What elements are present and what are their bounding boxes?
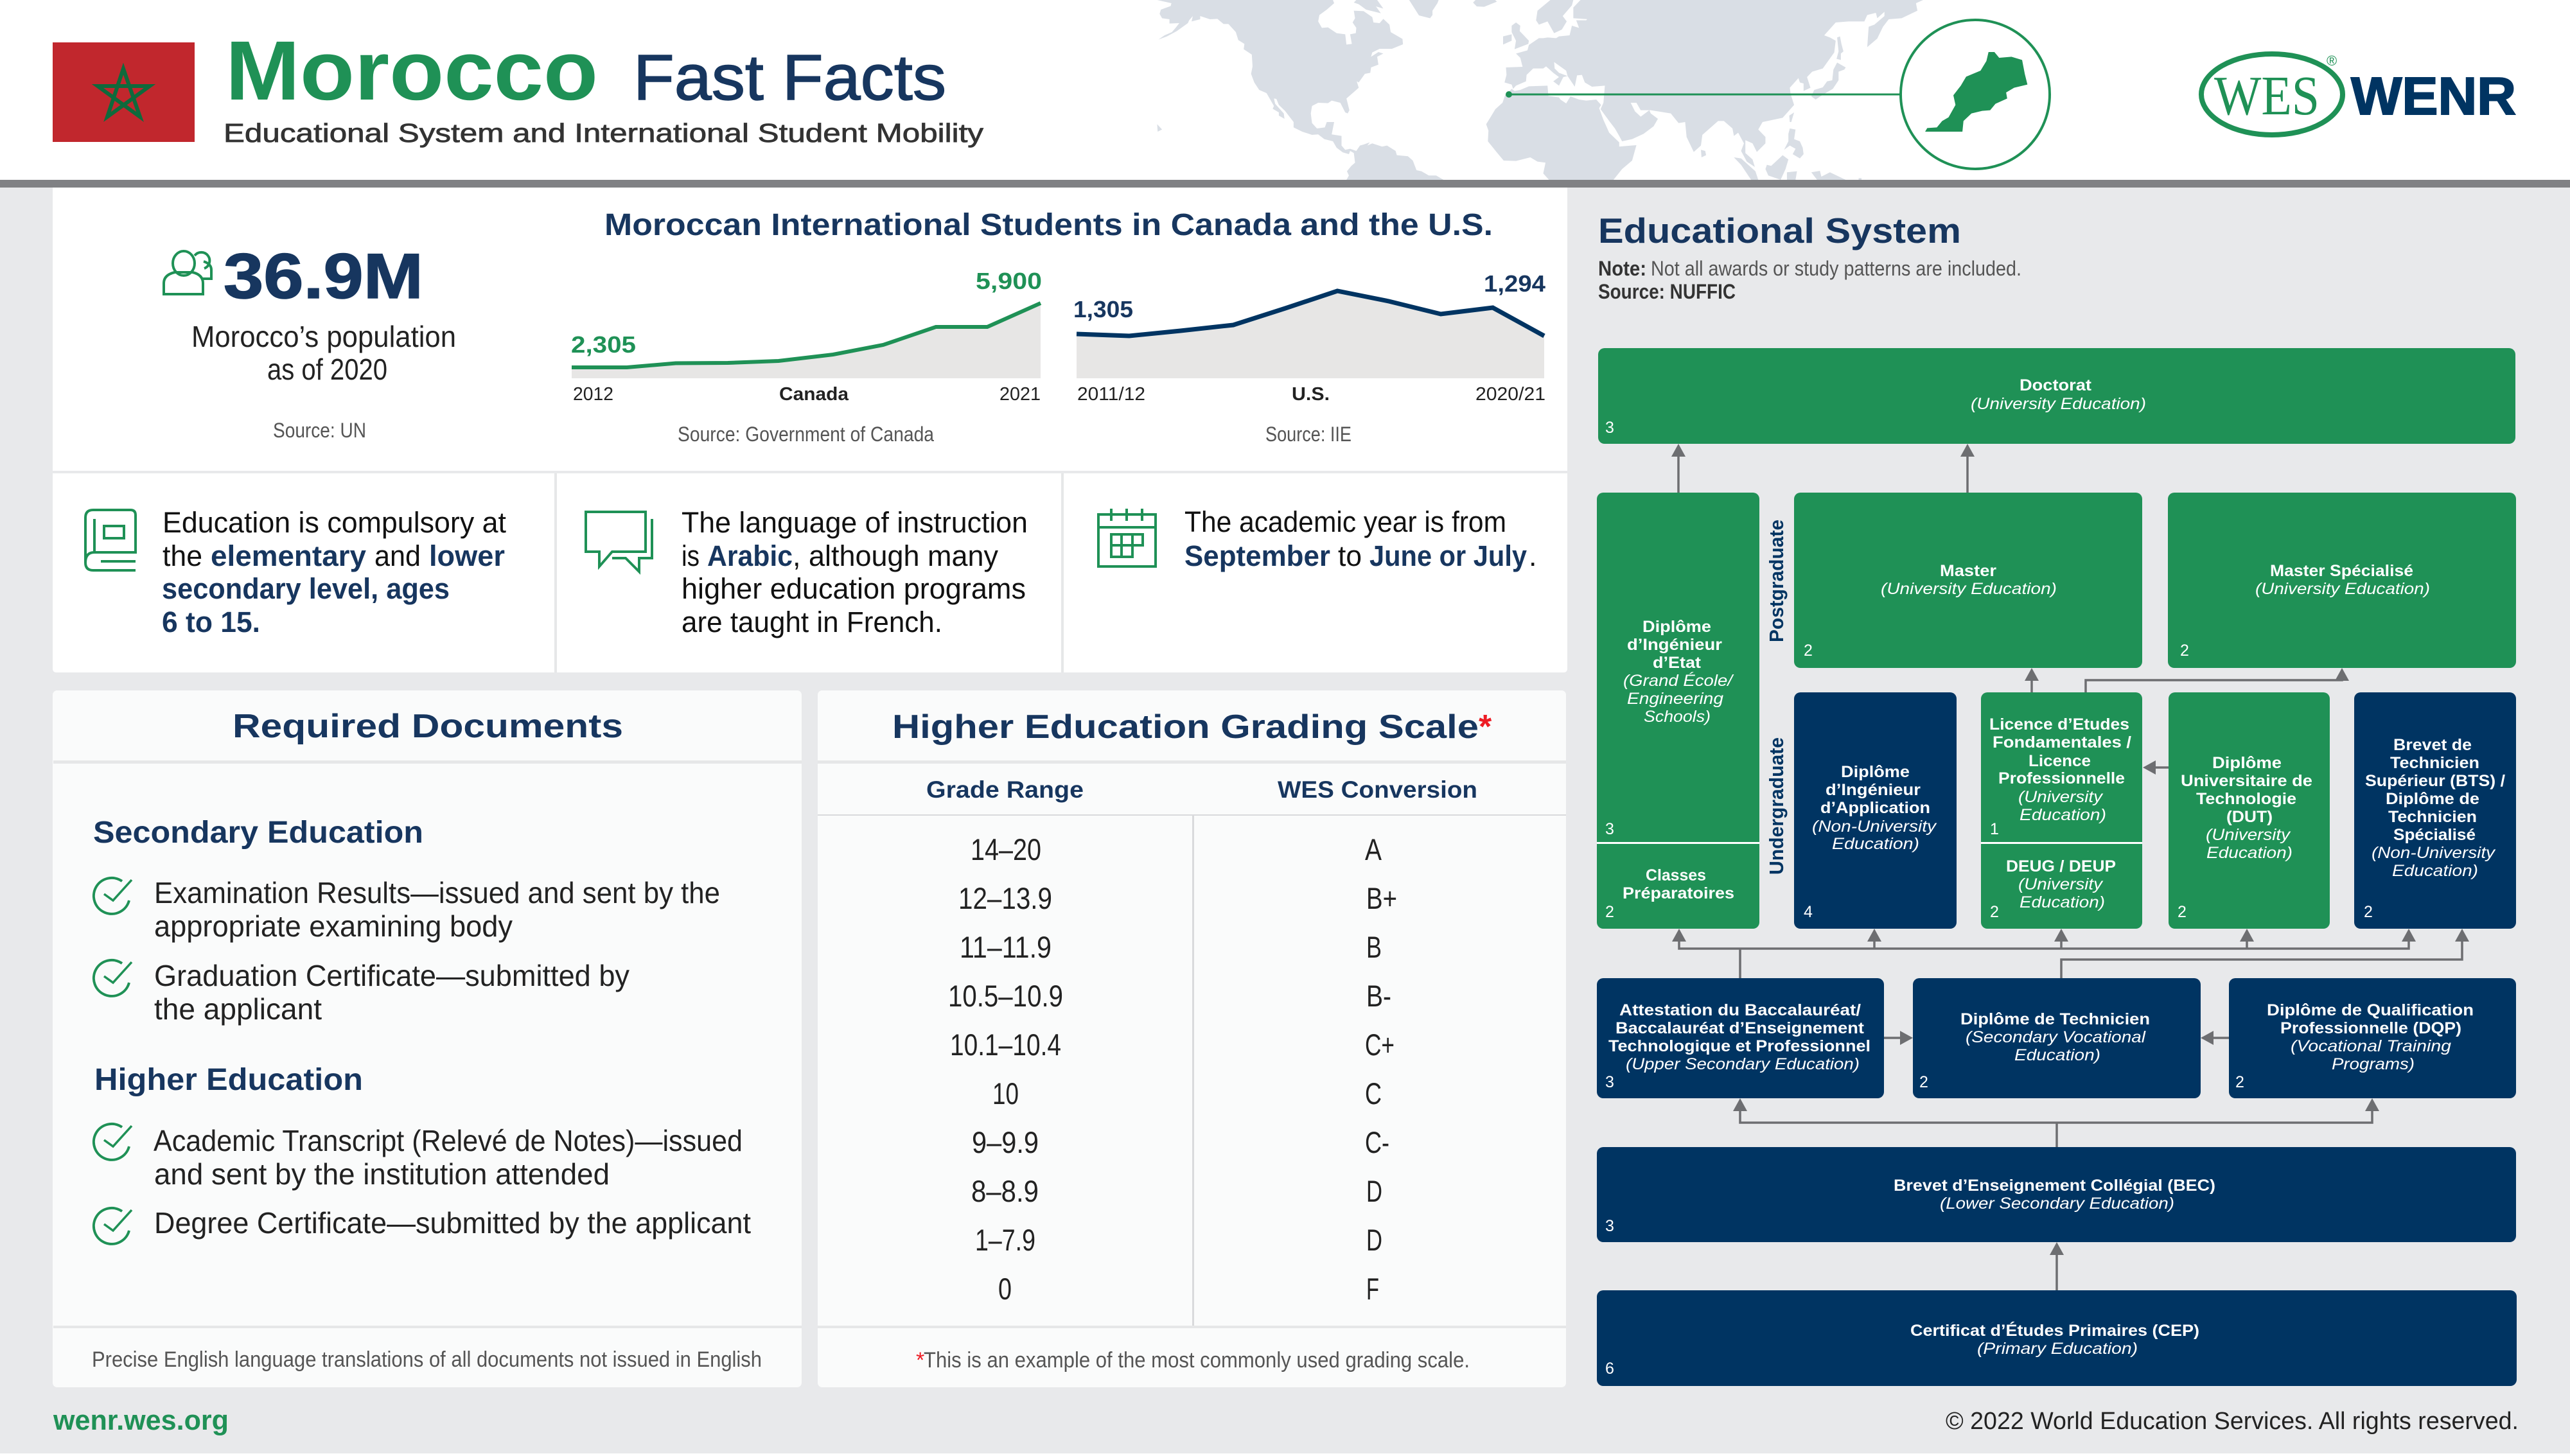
subheading: secondary education: Secondary Education: [93, 816, 423, 850]
table header: Grade Range: [926, 776, 1084, 803]
box: Master: [1794, 493, 2142, 668]
line chart: U.S.: 2011/12: [1077, 384, 1145, 405]
note and source: Not all awards or study patterns are included.: [1651, 257, 2021, 280]
box: Diplôme de Qualification Professionnelle: Programs): [2332, 1055, 2415, 1073]
icon: check: [94, 878, 132, 914]
box: Diplôme de Technicien: Diplôme de Technicien: [1960, 1010, 2150, 1028]
fact: academic year: to: [1338, 539, 1362, 572]
footnote: translations: Precise English language translations of all documents not issued in English: [92, 1347, 762, 1372]
box: Licence and DEUG / DEUP: DEUG / DEUP: [2006, 857, 2116, 875]
item: academic transcript: [154, 1124, 743, 1191]
panel: required documents: [53, 690, 802, 1387]
icon: speech bubbles: [586, 512, 652, 572]
box: BTS: Technicien: [2390, 754, 2479, 772]
heading: grading scale: Higher Education Grading Scale: [892, 708, 1479, 746]
box: BTS: Diplôme de: [2386, 790, 2479, 808]
box: BTS: Technicien: [2388, 808, 2477, 826]
item: academic transcript: and sent by the institution attended: [154, 1157, 610, 1191]
box: DUT: [2169, 692, 2330, 929]
fact: compulsory education: the: [163, 539, 202, 572]
box: BTS: (Non-University: [2372, 844, 2496, 862]
box: Master: 2: [1804, 642, 1813, 660]
grade range column: 10: [992, 1076, 1019, 1110]
box: Diplôme d'Ingénieur d'Etat and Classes Préparatoires: Diplôme: [1642, 618, 1711, 636]
box: DUT: Universitaire de: [2181, 772, 2312, 790]
table header: [926, 776, 1477, 803]
box: Diplôme d'Ingénieur d'Application: [1794, 692, 1957, 929]
grade range column: 14–20: [971, 832, 1041, 866]
line chart: Canada: Canada: [779, 384, 849, 405]
grade range column: 10.5–10.9: [948, 979, 1063, 1013]
line chart: Canada: [571, 268, 1042, 446]
WENR logo: WENR: [2351, 66, 2516, 126]
box: BEC: 3: [1605, 1217, 1614, 1235]
box: BTS: Education): [2392, 862, 2478, 880]
line chart: Canada: 2012: [573, 384, 613, 405]
item: degree certificate: Degree Certificate—submitted by the applicant: [154, 1206, 751, 1240]
fact: language of instruction: The language of instruction: [682, 506, 1028, 539]
box: Diplôme d'Ingénieur d'Application: d’Application: [1820, 799, 1930, 817]
population caption: Morocco’s population: [191, 320, 456, 353]
box: Licence and DEUG / DEUP: Licence: [2029, 752, 2091, 770]
box: DUT: Education): [2206, 844, 2293, 862]
box: Diplôme d'Ingénieur d'Etat and Classes Préparatoires: d’Etat: [1653, 654, 1702, 672]
item: graduation certificate: the applicant: [154, 992, 322, 1026]
box: CEP: 6: [1605, 1360, 1614, 1378]
icon: book: [85, 510, 136, 570]
note and source: Note:: [1598, 257, 1646, 280]
box: Attestation du Baccalauréat: (Upper Secondary Education): [1626, 1055, 1860, 1073]
box: Master Spécialisé: 2: [2180, 642, 2189, 660]
box: Diplôme de Qualification Professionnelle: Diplôme de Qualification: [2267, 1001, 2474, 1019]
population source: Source: UN: [273, 419, 366, 442]
box: BEC: [1597, 1147, 2516, 1242]
box: DUT: (DUT): [2226, 808, 2273, 826]
box: BTS: [2354, 692, 2516, 929]
title: [225, 23, 946, 118]
box: Licence and DEUG / DEUP: Education): [2020, 893, 2105, 911]
box: Diplôme d'Ingénieur d'Etat and Classes Préparatoires: Préparatoires: [1623, 884, 1734, 902]
grade range column: 9–9.9: [972, 1125, 1039, 1159]
box: Diplôme de Qualification Professionnelle: [2229, 978, 2516, 1098]
box: Diplôme d'Ingénieur d'Application: Diplôme: [1841, 763, 1910, 781]
box: Diplôme d'Ingénieur d'Application: 4: [1804, 903, 1813, 921]
fact: compulsory education: 6 to 15.: [162, 606, 260, 638]
box: Diplôme d'Ingénieur d'Etat and Classes Préparatoires: 3: [1605, 820, 1614, 838]
box: Licence and DEUG / DEUP: (University: [2018, 788, 2104, 806]
box: CEP: Certificat d’Études Primaires (CEP): [1910, 1321, 2199, 1340]
box: Doctorat: Doctorat: [2020, 376, 2092, 394]
box: Diplôme d'Ingénieur d'Etat and Classes Préparatoires: d’Ingénieur: [1627, 636, 1722, 654]
box: Diplôme de Technicien: (Secondary Vocational: [1966, 1028, 2147, 1046]
heading: required documents: Required Documents: [233, 708, 623, 745]
fact: compulsory education: elementary: [211, 539, 366, 572]
grade range column: 1–7.9: [975, 1223, 1035, 1257]
icon: check: [94, 1208, 132, 1244]
grade range column: 11–11.9: [960, 930, 1052, 964]
box: Doctorat: 3: [1605, 419, 1614, 437]
box: Master Spécialisé: (University Education): [2255, 580, 2430, 598]
item: graduation certificate: [154, 959, 629, 1026]
box: Diplôme d'Ingénieur d'Etat and Classes Préparatoires: Classes: [1646, 866, 1706, 884]
box: BTS: Spécialisé: [2393, 826, 2476, 844]
box: CEP: (Primary Education): [1977, 1340, 2138, 1358]
label: Postgraduate: Postgraduate: [1765, 520, 1788, 642]
box: DUT: (University: [2206, 826, 2291, 844]
note and source: [1598, 257, 2021, 303]
box: Attestation du Baccalauréat: Technologique et Professionnel: [1608, 1037, 1870, 1055]
grade range column: 12–13.9: [958, 881, 1052, 915]
box: Licence and DEUG / DEUP: Education): [2020, 806, 2106, 824]
box: Diplôme de Qualification Professionnelle: (Vocational Training: [2291, 1037, 2451, 1055]
box: Attestation du Baccalauréat: Attestation du Baccalauréat/: [1619, 1001, 1861, 1019]
map: Eurasia and Africa: [1486, 0, 1923, 180]
box: Diplôme d'Ingénieur d'Etat and Classes Préparatoires: (Grand École/: [1623, 671, 1734, 690]
panel: grading scale: [818, 690, 1566, 1387]
box: Diplôme d'Ingénieur d'Application: (Non-University: [1812, 818, 1937, 836]
population caption: [191, 320, 456, 386]
box: Master: Master: [1940, 562, 1996, 580]
box: Diplôme d'Ingénieur d'Etat and Classes Préparatoires: Engineering: [1627, 690, 1723, 708]
box: Licence and DEUG / DEUP: 2: [1990, 903, 1999, 921]
box: Licence and DEUG / DEUP: (University: [2018, 875, 2104, 893]
box: Diplôme d'Ingénieur d'Etat and Classes Préparatoires: Schools): [1644, 708, 1711, 726]
fact: academic year: September: [1184, 539, 1330, 572]
header band: [0, 0, 2570, 180]
subtitle: Educational System and International Student Mobility: [224, 118, 984, 148]
item: examination results: Examination Results—issued and sent by the: [154, 876, 720, 909]
chart title: Moroccan International Students in Canada and the U.S.: [604, 208, 1493, 242]
flag of Morocco: [53, 42, 195, 142]
box: Diplôme d'Ingénieur d'Etat and Classes Préparatoires: 2: [1605, 903, 1614, 921]
title: Morocco: [225, 23, 598, 118]
footnote: grading scale: This is an example of the most commonly used grading scale.: [924, 1348, 1470, 1373]
box: Licence and DEUG / DEUP: [1981, 692, 2142, 929]
world map background: [1157, 0, 1923, 180]
box: Diplôme de Technicien: Education): [2014, 1046, 2100, 1064]
icon: check: [94, 1124, 132, 1160]
line chart: Canada: 2021: [999, 384, 1041, 405]
WES conversion column: C: [1365, 1076, 1382, 1110]
box: Attestation du Baccalauréat: 3: [1605, 1073, 1614, 1091]
box: Diplôme d'Ingénieur d'Application: Education): [1832, 835, 1919, 853]
fact: language of instruction: higher education programs: [682, 572, 1026, 605]
fact: language of instruction: is: [682, 539, 700, 572]
title: Fast Facts: [633, 42, 946, 114]
fact: compulsory education: lower: [429, 539, 505, 572]
fact: academic year: June or July: [1369, 539, 1527, 572]
grade range column: 10.1–10.4: [950, 1028, 1061, 1062]
fact: language of instruction: are taught in French.: [682, 606, 942, 638]
grade range column: 0: [998, 1272, 1012, 1306]
subheading: higher education: Higher Education: [94, 1063, 363, 1097]
footnote: grading scale: *: [916, 1348, 924, 1373]
box: Diplôme d'Ingénieur d'Application: d’Ingénieur: [1826, 781, 1921, 799]
WES logo: WES: [2214, 64, 2319, 127]
box: Attestation du Baccalauréat: [1597, 978, 1884, 1098]
panel: population and student charts: [53, 188, 1567, 471]
fact: compulsory education: secondary level, ages: [162, 572, 450, 605]
line chart: Canada: 5,900: [976, 268, 1042, 294]
map: Americas: [1157, 0, 1497, 180]
note and source: Source: NUFFIC: [1598, 280, 1736, 303]
WES logo: ®: [2327, 53, 2337, 69]
connector arrows: [1671, 444, 2469, 1290]
grade range column: [948, 832, 1063, 1306]
item: academic transcript: Academic Transcript (Relevé de Notes)—issued: [154, 1124, 743, 1157]
heading: educational system: Educational System: [1598, 211, 1961, 250]
footer: copyright: © 2022 World Education Services. All rights reserved.: [1946, 1408, 2519, 1435]
WES conversion column: F: [1366, 1272, 1379, 1306]
WES logo: [2201, 53, 2343, 135]
fact: academic year: .: [1529, 539, 1537, 572]
box: BEC: Brevet d’Enseignement Collégial (BEC): [1894, 1177, 2215, 1195]
box: Licence and DEUG / DEUP: 1: [1990, 820, 1999, 838]
box: Master: (University Education): [1881, 580, 2057, 598]
line chart: Canada: 2,305: [571, 331, 636, 358]
line chart: U.S.: [1073, 270, 1545, 446]
box: Doctorat: [1598, 348, 2515, 444]
line chart: U.S.: Source: IIE: [1265, 423, 1351, 446]
line chart: U.S.: 2020/21: [1475, 384, 1545, 405]
line chart: U.S.: U.S.: [1292, 384, 1330, 405]
WES conversion column: D: [1366, 1223, 1382, 1257]
box: Licence and DEUG / DEUP: Fondamentales /: [1993, 733, 2131, 751]
line chart: U.S.: 1,294: [1484, 270, 1545, 297]
WES conversion column: C+: [1365, 1028, 1395, 1062]
fact: academic year: [1184, 505, 1537, 572]
WES conversion column: B-: [1366, 979, 1391, 1013]
fact: compulsory education: [162, 506, 506, 638]
box: Diplôme de Qualification Professionnelle: Professionnelle (DQP): [2280, 1019, 2461, 1037]
line chart: U.S.: 1,305: [1073, 296, 1133, 322]
box: DUT: Diplôme: [2212, 754, 2282, 772]
panel: educational system: [1597, 211, 2517, 1386]
population figure: 36.9M: [224, 240, 423, 311]
box: Licence and DEUG / DEUP: Professionnelle: [1998, 769, 2125, 787]
grade range column: 8–8.9: [971, 1174, 1039, 1208]
box: DUT: Technologie: [2196, 790, 2296, 808]
box: BTS: Brevet de: [2393, 736, 2472, 754]
footer: website: wenr.wes.org: [53, 1405, 229, 1436]
box: BEC: (Lower Secondary Education): [1940, 1195, 2174, 1213]
icon: people: [164, 251, 211, 294]
box: Diplôme de Qualification Professionnelle: 2: [2235, 1073, 2244, 1091]
item: examination results: appropriate examining body: [154, 909, 513, 943]
box: Attestation du Baccalauréat: Baccalauréat d’Enseignement: [1615, 1019, 1865, 1037]
map locator line and circle: [1506, 20, 2050, 169]
WES conversion column: [1365, 832, 1397, 1306]
population caption: as of 2020: [267, 353, 387, 386]
label: Undergraduate: Undergraduate: [1765, 737, 1788, 875]
item: graduation certificate: Graduation Certificate—submitted by: [154, 959, 629, 992]
item: examination results: [154, 876, 720, 943]
WES conversion column: D: [1366, 1174, 1382, 1208]
WES conversion column: C-: [1365, 1125, 1389, 1159]
box: Diplôme de Technicien: 2: [1919, 1073, 1928, 1091]
WES conversion column: B+: [1366, 881, 1397, 915]
panel: key facts strip: [53, 473, 1567, 672]
box: Master Spécialisé: [2168, 493, 2516, 668]
WES conversion column: B: [1366, 930, 1382, 964]
box: BTS: Supérieur (BTS) /: [2365, 772, 2505, 790]
table header: WES Conversion: [1278, 776, 1477, 803]
fact: language of instruction: Arabic: [707, 539, 793, 572]
box: Licence and DEUG / DEUP: Licence d’Etudes: [1989, 715, 2129, 733]
fact: language of instruction: , although many: [793, 539, 998, 572]
box: DUT: 2: [2178, 903, 2187, 921]
box: Diplôme de Technicien: [1913, 978, 2201, 1098]
icon: check: [94, 960, 132, 996]
box: CEP: [1597, 1290, 2517, 1386]
fact: compulsory education: Education is compulsory at: [163, 506, 506, 539]
fact: language of instruction: [682, 506, 1028, 638]
icon: calendar: [1098, 509, 1156, 566]
box: Master Spécialisé: Master Spécialisé: [2270, 562, 2413, 580]
fact: compulsory education: and: [374, 539, 421, 572]
line chart: Canada: Source: Government of Canada: [678, 423, 934, 446]
box: Diplôme d'Ingénieur d'Etat and Classes Préparatoires: [1597, 493, 1759, 929]
heading: grading scale: *: [1479, 708, 1492, 746]
box: Doctorat: (University Education): [1971, 395, 2146, 413]
box: BTS: 2: [2364, 903, 2373, 921]
fact: academic year: The academic year is from: [1184, 505, 1506, 538]
WES conversion column: A: [1365, 832, 1382, 866]
